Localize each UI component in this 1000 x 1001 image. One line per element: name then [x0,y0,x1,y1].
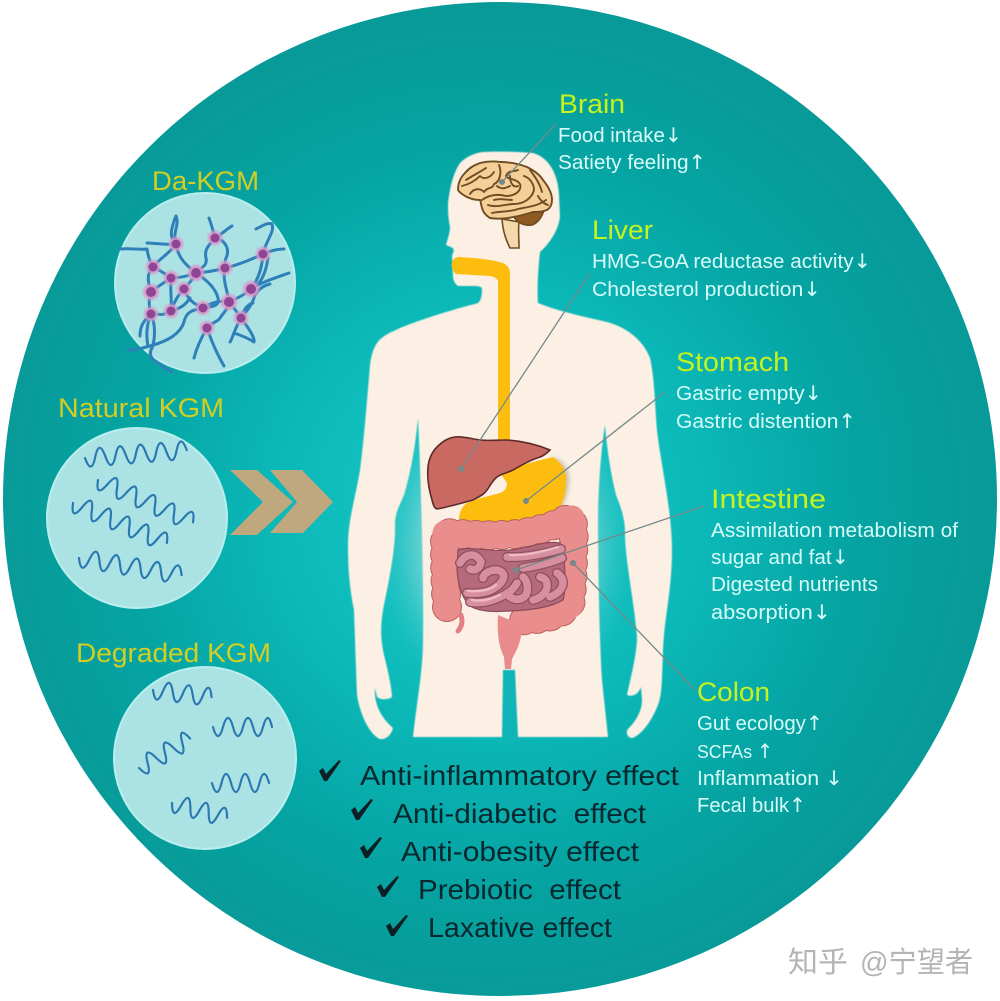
label: Stomach: Gastric empty ↓ [676,381,822,405]
label: Intestine: Digested nutrients [711,574,878,596]
watermark: @宁望者 [861,947,974,980]
label: Colon: Inflammation ↓ [697,766,843,790]
label: Liver: Liver [592,215,653,245]
leader lines and organ dots [458,124,704,690]
label: Stomach [676,347,856,433]
appendix [458,615,462,631]
circle: Degraded KGM background [114,667,296,849]
effect list text [360,760,679,943]
label: Intestine: absorption ↓ [711,600,831,624]
effect list text: Anti-inflammatory effect [360,760,679,791]
circle: Da-KGM background [115,193,295,373]
short wavy chains [134,681,272,826]
digestive tract: esophagus and mouth [452,257,512,442]
effect list text: Anti-obesity effect [401,836,639,867]
organ: liver [428,437,550,509]
heading: Da-KGM: Da-KGM [152,166,259,196]
effect list text: Prebiotic effect [418,874,621,905]
label: Intestine: Assimilation metabolism of [711,520,958,542]
icon: check marks [319,760,408,936]
label: Brain: Brain [559,89,625,119]
label: Colon: Fecal bulk↑ [697,793,806,817]
heading: Degraded KGM: Degraded KGM [76,638,271,668]
effects checklist [319,760,679,943]
long wavy chains [69,441,197,584]
label: Stomach: Gastric distention ↑ [676,409,856,433]
watermark: 知乎 [788,946,848,979]
organ: stomach [459,457,569,528]
label: Stomach: Stomach [676,347,789,377]
brain stem [502,219,519,248]
label: Brain [558,89,706,174]
label: Colon: Gut ecology↑ [697,711,823,735]
gap between legs [498,662,522,740]
label: Colon: SCFAs ↑ [697,739,773,763]
arrow: double chevron [230,470,333,535]
network of crosslinked fibres [120,216,289,372]
label: Intestine [711,484,958,624]
heading: Natural KGM: Natural KGM [58,393,224,423]
circle: Natural KGM background [47,428,227,608]
colon scalloped edge shadow [445,518,574,621]
cerebellum [514,209,544,225]
crosslink nodes [143,231,270,335]
panel: Natural KGM [47,393,227,608]
watermark: 知乎 [789,947,849,980]
watermark: @宁望者 [860,946,973,979]
label: Liver [592,215,871,301]
brain folds [462,165,548,213]
label: Intestine: sugar and fat↓ [711,545,849,569]
watermark [788,946,974,980]
panel: Da-KGM [115,166,295,373]
label: Liver: Cholesterol production ↓ [592,277,821,301]
body silhouette [348,152,672,739]
label: Colon [697,677,843,817]
organ: large intestine (colon) [445,518,574,669]
organ: small intestine [457,542,565,611]
effect list text: Anti-diabetic effect [393,798,646,829]
organ: brain [458,161,552,248]
label: Brain: Satiety feeling↑ [558,150,706,174]
panel: Degraded KGM [76,638,296,849]
glow behind body [375,375,635,715]
label: Brain: Food intake↓ [558,123,682,147]
label: Liver: HMG-GoA reductase activity ↓ [592,249,871,273]
cerebrum [458,161,552,219]
label: Colon: Colon [697,677,770,707]
rectum [498,615,522,669]
effect list text: Laxative effect [428,912,612,943]
label: Intestine: Intestine [711,484,826,514]
